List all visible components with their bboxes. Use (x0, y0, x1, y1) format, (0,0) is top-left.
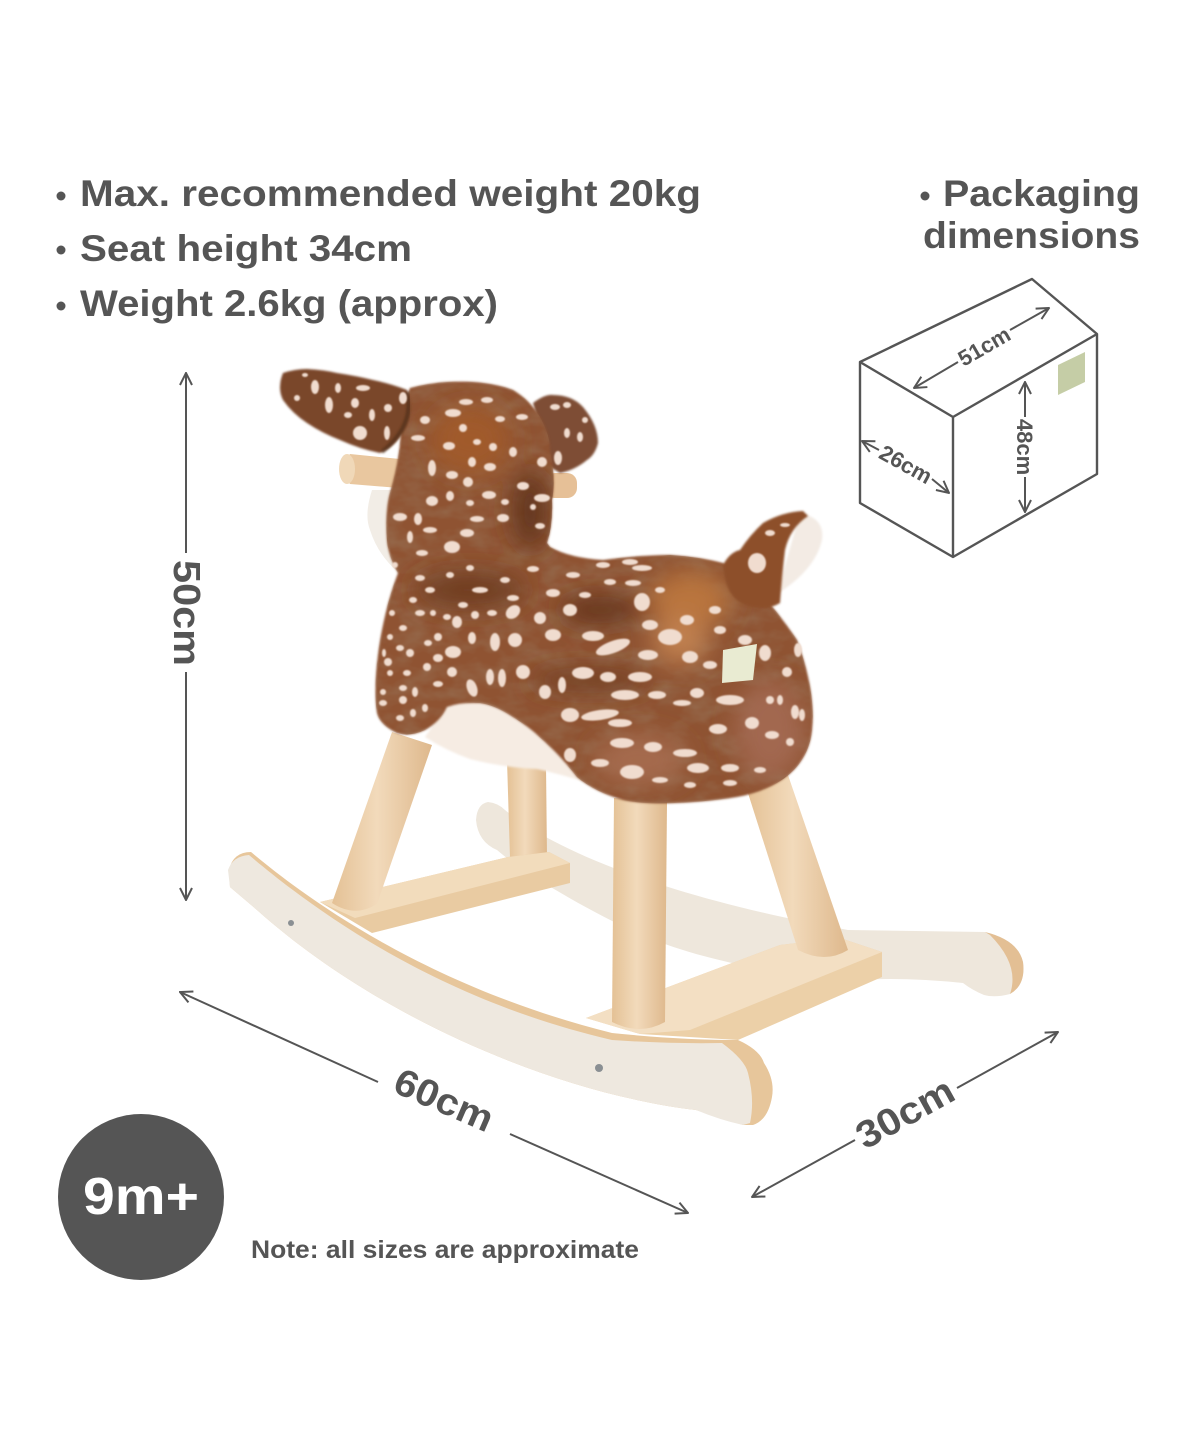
fur shading (370, 375, 820, 810)
spec: product weight: Weight 2.6kg (approx) (80, 283, 498, 324)
spec: max weight: Max. recommended weight 20kg (80, 173, 701, 214)
box 26cm: 26cm (875, 440, 936, 489)
rear crossbar (320, 852, 570, 933)
depth dimension 60cm: 60cm (388, 1061, 500, 1141)
box 51cm: 51cm (954, 322, 1015, 371)
belly (425, 700, 585, 782)
packaging heading: dimensions (923, 215, 1140, 256)
box label sticker (1058, 352, 1085, 395)
near ear (280, 369, 411, 453)
box outline (860, 279, 1097, 557)
box 51cm (914, 308, 1049, 388)
far handle dowel end (545, 473, 577, 498)
spec list (56, 173, 701, 324)
height dimension 50cm: 50cm (165, 560, 207, 666)
fawn spots (294, 373, 805, 788)
green care tag (722, 644, 757, 683)
front rocker (228, 852, 773, 1125)
width dimension 30cm: 30cm (849, 1070, 962, 1158)
tail (723, 511, 822, 608)
back leg (507, 760, 547, 864)
age badge (58, 1114, 224, 1280)
centre leg (612, 798, 667, 1029)
spec: seat height: Seat height 34cm (80, 228, 412, 269)
box 26cm (862, 440, 949, 493)
infographic canvas (56, 179, 1138, 1280)
box 48cm: 48cm (1012, 419, 1037, 475)
torso and neck (376, 382, 813, 803)
back rocker (476, 802, 1023, 996)
white chest fur (367, 490, 400, 572)
right leg (747, 775, 848, 957)
far ear (533, 395, 598, 473)
ear base shadow (382, 392, 409, 452)
age badge: 9m+ (83, 1168, 199, 1226)
front leg left (332, 732, 432, 911)
deer body (280, 369, 822, 810)
rocking deer illustration (228, 369, 1023, 1125)
depth dimension 60cm (180, 992, 688, 1213)
width dimension 30cm (752, 1032, 1058, 1197)
packaging heading: Packaging (943, 173, 1140, 214)
front crossbar (586, 938, 882, 1040)
packaging heading (920, 173, 1140, 256)
box 48cm (1012, 382, 1037, 512)
packaging box diagram (860, 279, 1097, 557)
near handle dowel (339, 454, 412, 489)
note: Note: all sizes are approximate (251, 1236, 639, 1264)
